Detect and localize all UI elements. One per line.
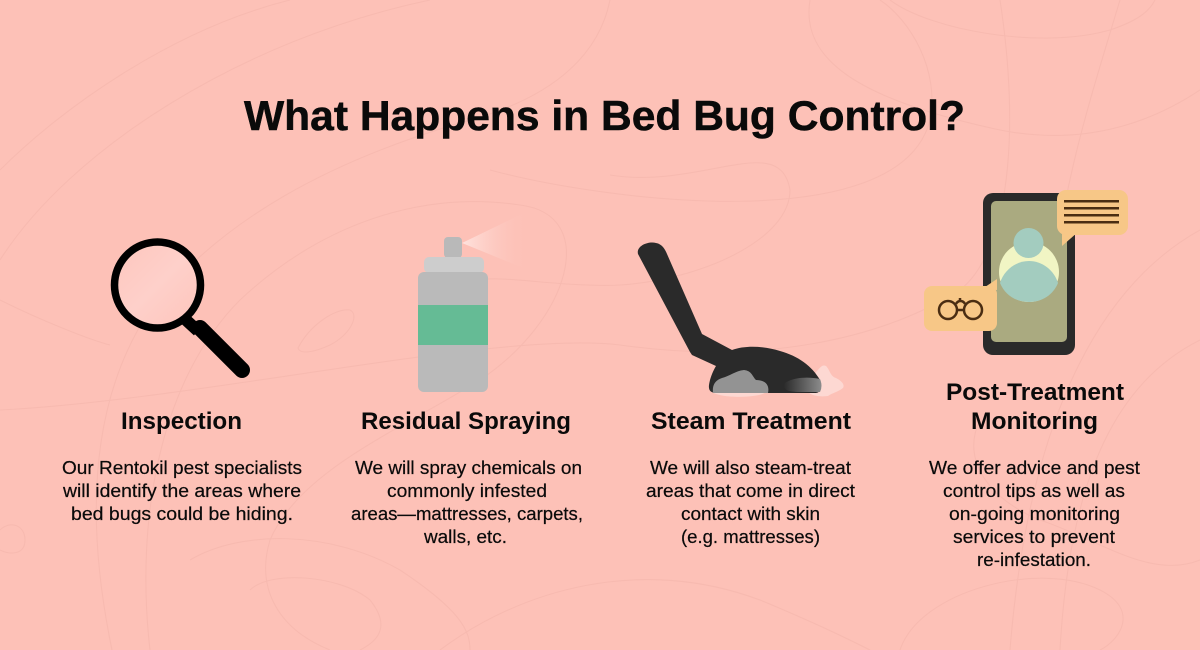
- text: monitoring description: services to prevent: [953, 527, 1115, 547]
- heading: residual spraying: Residual Spraying: [361, 408, 571, 435]
- panel: steam treatment: [638, 243, 855, 547]
- text: steam description: contact with skin: [681, 504, 820, 524]
- text: spraying description: [351, 458, 583, 547]
- text: steam description: [646, 458, 855, 547]
- heading: steam treatment: Steam Treatment: [651, 408, 851, 435]
- panel: post-treatment monitoring: [924, 190, 1140, 570]
- text: steam description: areas that come in direct: [646, 481, 855, 501]
- text: monitoring description: on-going monitoring: [949, 504, 1120, 524]
- heading: post-treatment monitoring: Monitoring: [971, 408, 1098, 435]
- text: monitoring description: re-infestation.: [977, 550, 1091, 570]
- text: spraying description: areas—mattresses, carpets,: [351, 504, 583, 524]
- text: monitoring description: [929, 458, 1140, 570]
- heading: post-treatment monitoring: [946, 379, 1124, 435]
- text: spraying description: walls, etc.: [423, 527, 507, 547]
- icon: spray can: [418, 214, 528, 392]
- panel: inspection: [62, 242, 302, 524]
- text: monitoring description: We offer advice and pest: [929, 458, 1140, 478]
- title: What Happens in Bed Bug Control?: [244, 92, 965, 139]
- text: inspection description: will identify the areas where: [62, 481, 301, 501]
- text: steam description: We will also steam-treat: [650, 458, 851, 478]
- icon: phone with chat bubbles: [924, 190, 1128, 355]
- text: inspection description: Our Rentokil pest specialists: [62, 458, 302, 478]
- text: inspection description: [62, 458, 302, 524]
- heading: inspection: Inspection: [121, 408, 242, 435]
- icon: binoculars: [939, 298, 982, 319]
- text: steam description: (e.g. mattresses): [681, 527, 820, 547]
- text: inspection description: bed bugs could be hiding.: [71, 504, 293, 524]
- text: spraying description: We will spray chemicals on: [355, 458, 582, 478]
- icon: steam cleaner: [638, 243, 844, 397]
- panel: residual spraying: [351, 214, 583, 547]
- icon: magnifying glass: [114, 242, 242, 370]
- heading: post-treatment monitoring: Post-Treatment: [946, 379, 1124, 406]
- text: monitoring description: control tips as well as: [943, 481, 1125, 501]
- text: spraying description: commonly infested: [387, 481, 547, 501]
